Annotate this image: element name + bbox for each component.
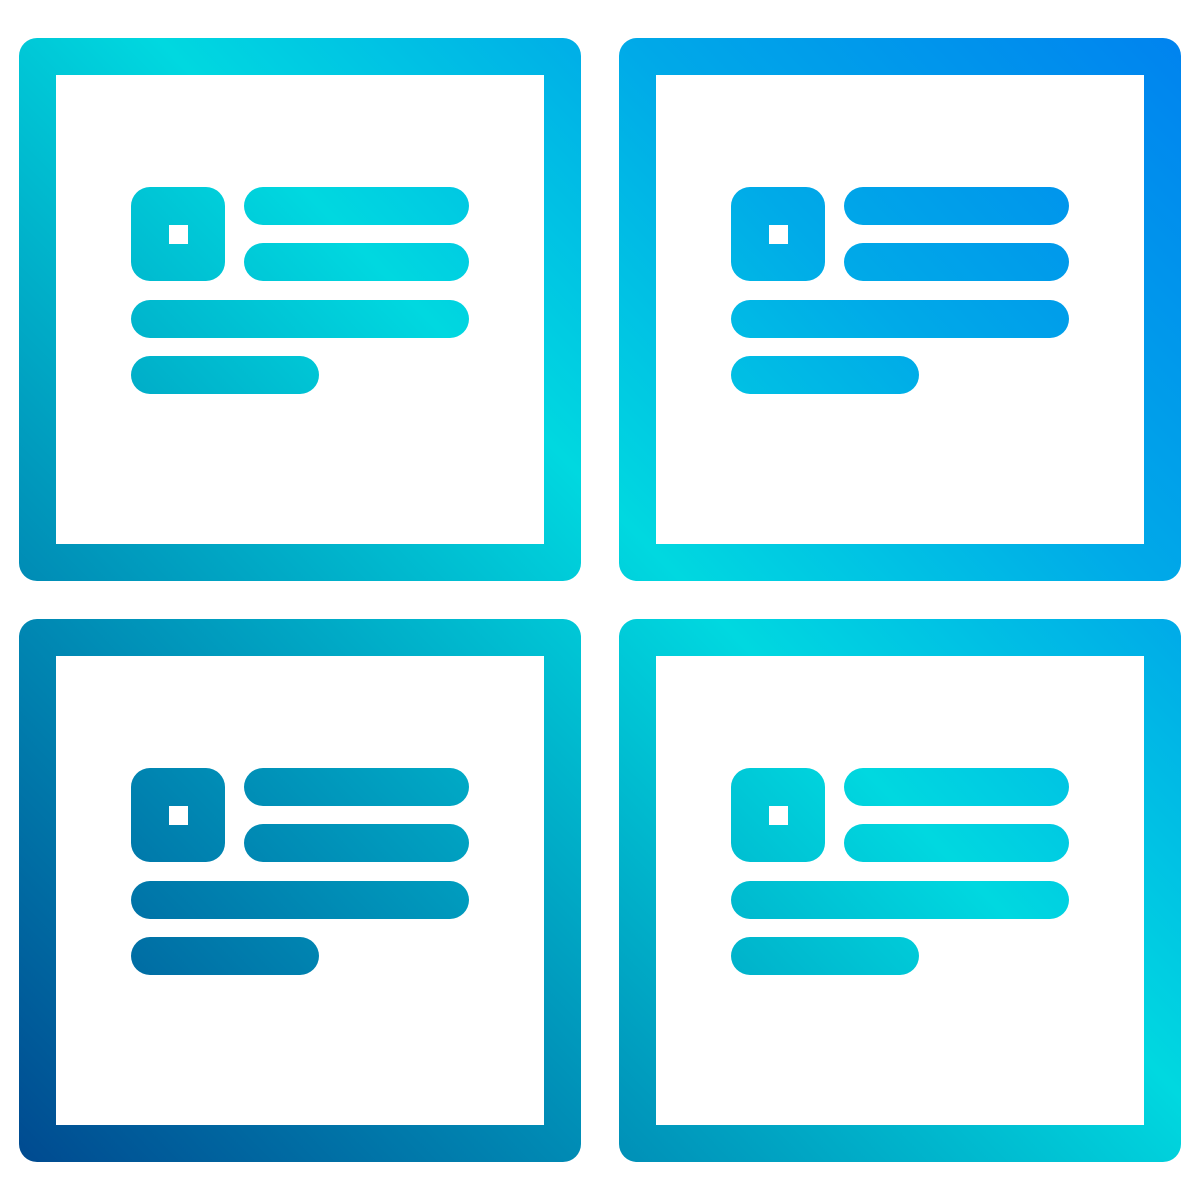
text line 4 xyxy=(731,356,919,394)
text line 3 xyxy=(131,881,469,919)
text line 4 xyxy=(131,356,319,394)
text line 1 xyxy=(244,768,469,806)
text line 2 xyxy=(244,243,469,281)
panel: bottom right xyxy=(619,619,1181,1162)
panel: top right xyxy=(619,38,1181,581)
text line 4 xyxy=(131,937,319,975)
panel frame: top left xyxy=(19,38,581,581)
text line 2 xyxy=(844,243,1069,281)
icon: square thumbnail xyxy=(731,187,825,281)
text line 2 xyxy=(844,824,1069,862)
text line 2 xyxy=(244,824,469,862)
text line 1 xyxy=(844,768,1069,806)
text line 3 xyxy=(131,300,469,338)
text line 3 xyxy=(731,881,1069,919)
panel frame: top right xyxy=(619,38,1181,581)
text line 1 xyxy=(244,187,469,225)
icon: square thumbnail xyxy=(131,187,225,281)
text line 3 xyxy=(731,300,1069,338)
panel frame: bottom right xyxy=(619,619,1181,1162)
text line 4 xyxy=(731,937,919,975)
text line 1 xyxy=(844,187,1069,225)
icon: square thumbnail xyxy=(731,768,825,862)
panel: bottom left xyxy=(19,619,581,1162)
panel frame: bottom left xyxy=(19,619,581,1162)
icon: square thumbnail xyxy=(131,768,225,862)
panel: top left xyxy=(19,38,581,581)
